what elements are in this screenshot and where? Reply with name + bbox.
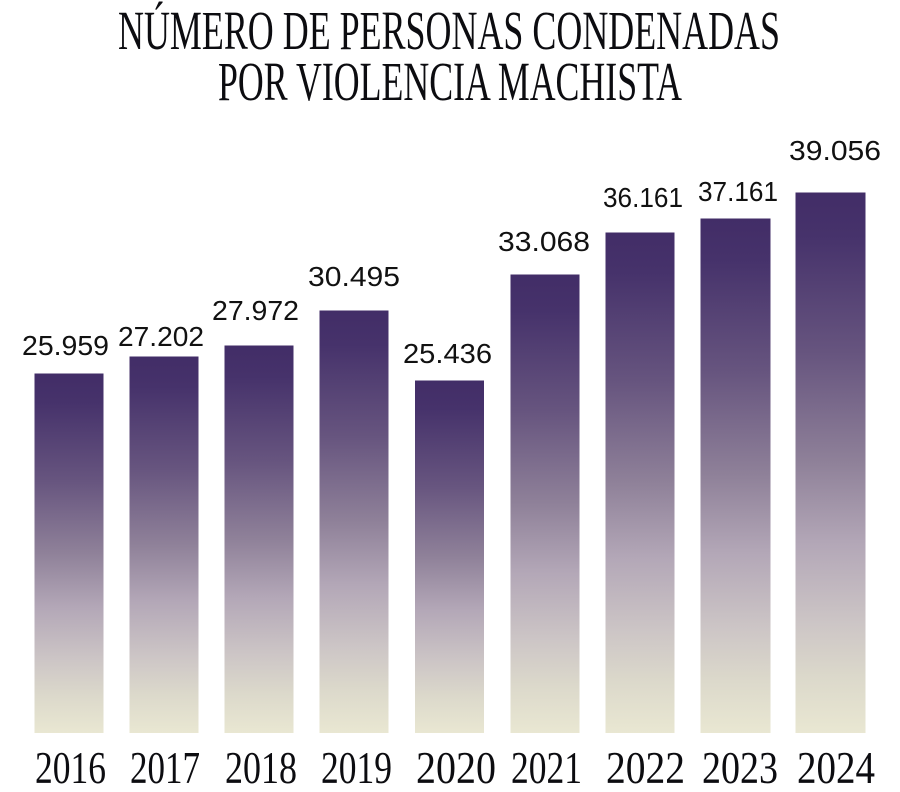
bar 2022: 36.161 — [603, 182, 683, 213]
bar 2017 — [118, 321, 204, 792]
bar 2021: 33.068 — [498, 226, 590, 257]
bar 2019 — [308, 261, 400, 792]
bar 2022: 2022 — [606, 743, 685, 792]
bar 2018 — [212, 295, 299, 792]
bar 2017: 27.202 — [118, 321, 204, 352]
title — [118, 0, 780, 112]
bar 2022 — [603, 182, 685, 792]
bar 2020 — [403, 338, 496, 792]
bar 2020: 25.436 — [403, 338, 492, 369]
bar 2016: 25.959 — [22, 330, 109, 361]
bar 2023: 2023 — [702, 743, 778, 792]
bar 2024: 2024 — [797, 743, 875, 792]
bar 2016: 2016 — [35, 743, 106, 792]
bar 2019: 2019 — [321, 743, 392, 792]
bar 2019: 30.495 — [308, 261, 400, 292]
bar 2018: 2018 — [225, 743, 297, 792]
bar 2024 — [789, 135, 881, 792]
bar 2023: 37.161 — [698, 176, 778, 207]
bar 2018: 27.972 — [212, 295, 299, 326]
bar chart — [22, 135, 881, 792]
bar 2023 — [698, 176, 778, 792]
bar 2021: 2021 — [511, 743, 582, 792]
bar 2016 — [22, 330, 109, 792]
bar 2020: 2020 — [416, 743, 496, 792]
bar 2017: 2017 — [130, 743, 200, 792]
bar 2021 — [498, 226, 590, 792]
bar 2024: 39.056 — [789, 135, 881, 166]
